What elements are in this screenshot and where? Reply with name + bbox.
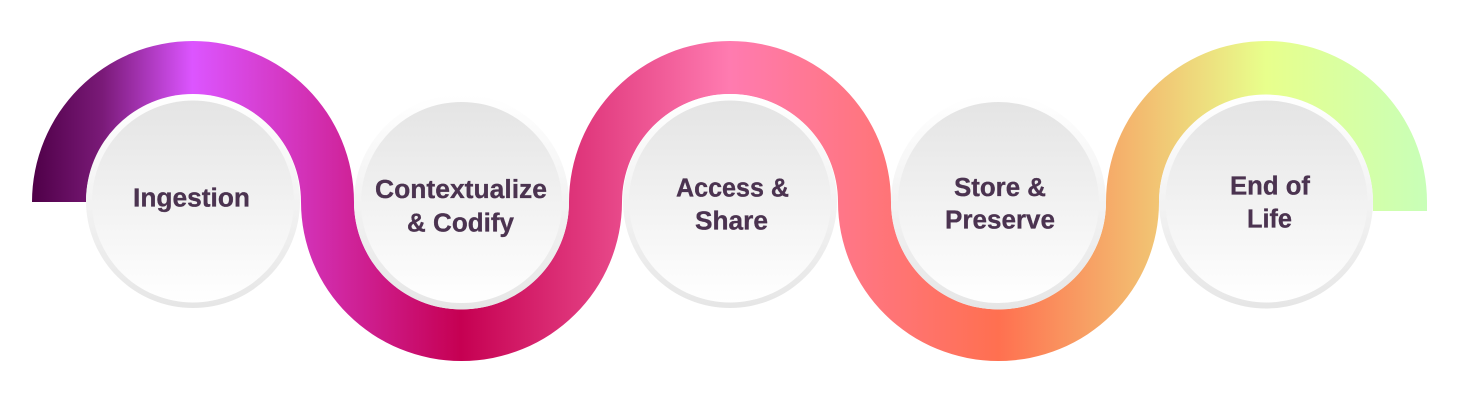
step 1: Ingestion: Ingestion [133, 184, 250, 212]
wave ribbon [32, 41, 1427, 361]
step 2: Contextualize & Codify: & Codify [407, 210, 515, 238]
step 4: Store & Preserve: Store & [954, 174, 1046, 202]
step 4: Store & Preserve: Preserve [945, 206, 1055, 234]
step 4: Store & Preserve [891, 94, 1106, 310]
step 5: End of Life [1159, 94, 1373, 308]
step 2: Contextualize & Codify: Contextualize [375, 176, 547, 204]
step 2: Contextualize & Codify [354, 94, 569, 310]
step 5: End of Life: Life [1247, 206, 1292, 234]
step 3: Access & Share: Share [695, 208, 768, 236]
step 5: End of Life: End of [1230, 172, 1310, 200]
step 1: Ingestion [86, 94, 300, 308]
step 3: Access & Share: Access & [676, 174, 789, 202]
step 3: Access & Share [623, 94, 837, 308]
